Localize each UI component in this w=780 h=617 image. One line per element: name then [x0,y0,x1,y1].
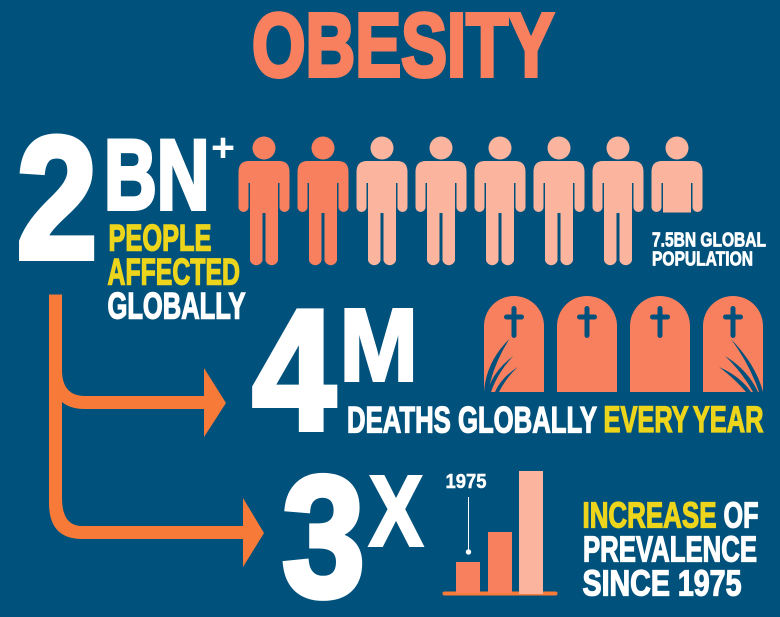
label: people affected globally: PEOPLE [108,217,212,258]
label: 7.5bn global population [652,230,766,271]
label: increase of prevalence since 1975: INCREASE [582,494,716,536]
label: deaths globally every year: DEATHS GLOBALLY [347,399,597,440]
arrows from 2BN to 4M and 3X [49,294,264,567]
plus sign: + [211,126,235,170]
bar: 1975 [456,562,480,593]
X unit: X [369,456,423,568]
tombstone 1 with grass [484,296,544,392]
label: increase of prevalence since 1975 [582,494,758,604]
tombstone 2 [557,296,617,392]
label: increase of prevalence since 1975: SINCE 1975 [582,562,742,604]
unaffected people [356,136,702,265]
big number 4: 4 [252,275,336,466]
bar: middle [488,532,512,593]
tombstone 4 with grass [703,296,763,392]
pointer to 1975 bar [466,497,471,555]
M unit: M [340,288,418,402]
stat: 3X increase [282,441,423,617]
bar chart: prevalence since 1975 [442,471,558,596]
tombstones [484,296,763,392]
stat: 2BN+ people affected [16,100,246,326]
affected people [238,136,348,265]
label: increase of prevalence since 1975: OF [724,494,758,536]
stat: 4M deaths [252,275,764,466]
big number 2: 2 [16,100,98,295]
pictogram: 8 people representing 7.5bn [238,136,702,265]
label: people affected globally [108,217,246,326]
bar: today [519,471,543,594]
label: 7.5bn global population: POPULATION [652,249,753,271]
BN unit: BN [104,119,210,230]
label: people affected globally: AFFECTED [108,251,240,292]
label: 1975: 1975 [446,471,486,493]
bar chart baseline [442,592,558,596]
label: people affected globally: GLOBALLY [108,286,246,326]
tombstone 3 [630,296,690,392]
